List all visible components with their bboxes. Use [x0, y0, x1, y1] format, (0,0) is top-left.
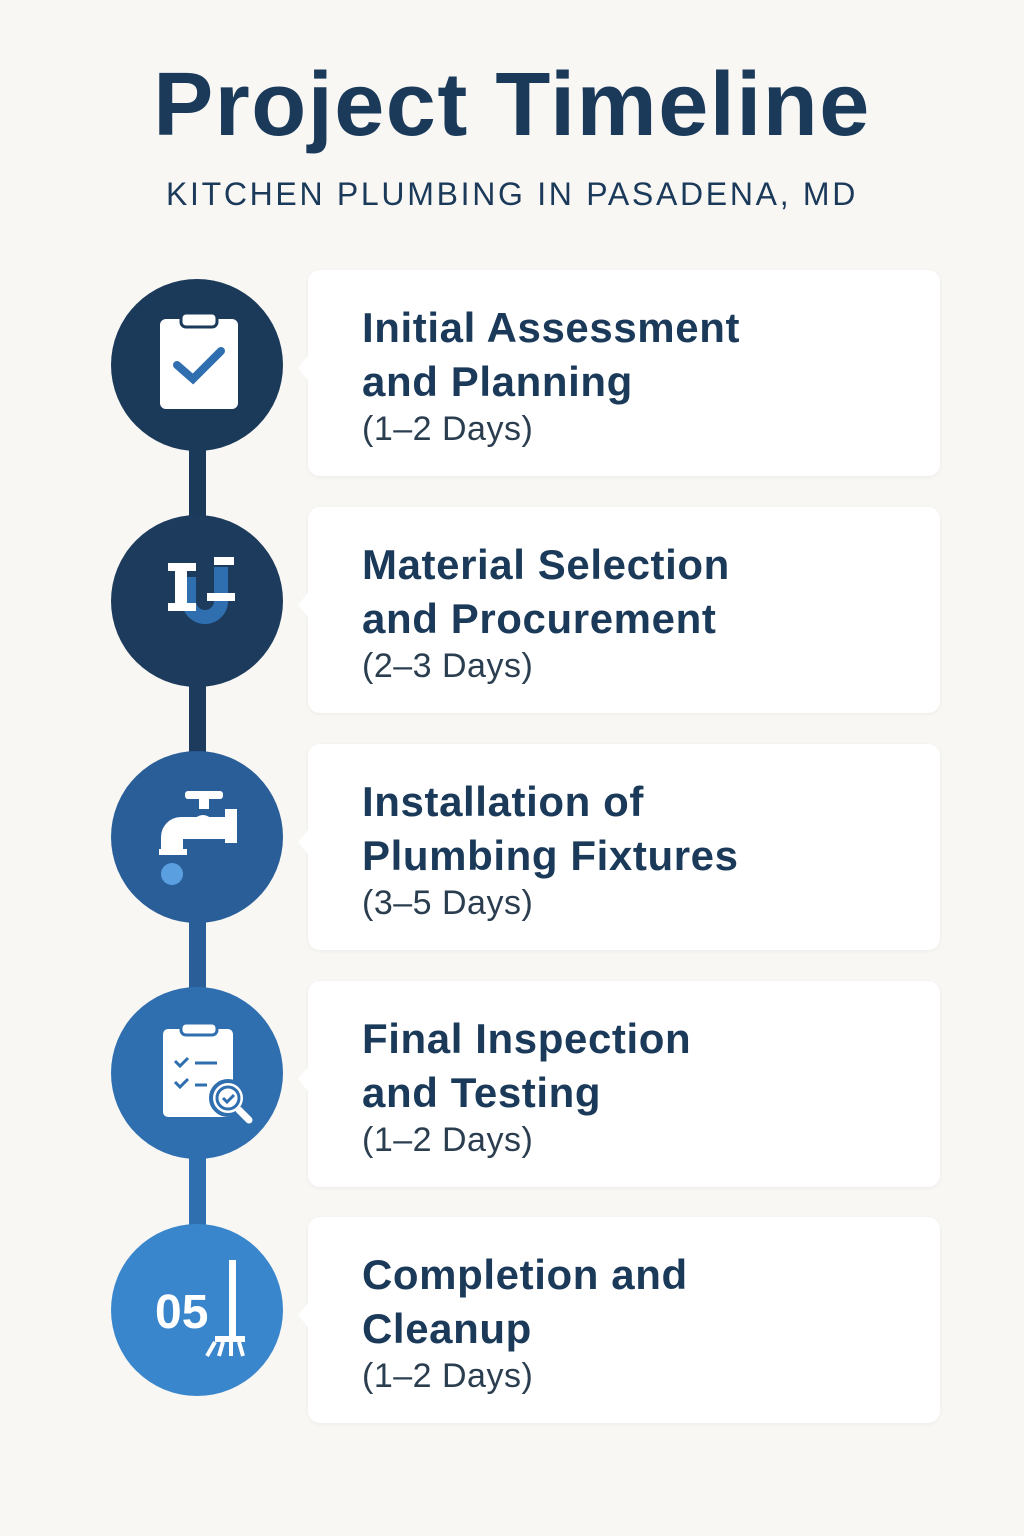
card 2: Material Selection: [362, 541, 730, 588]
card 3: [308, 744, 940, 950]
card 4: [308, 981, 940, 1187]
title: Project Timeline: [153, 55, 871, 155]
card 4: and Testing: [362, 1069, 601, 1116]
card 4: Final Inspection: [362, 1015, 691, 1062]
card 5: Completion and: [362, 1251, 688, 1298]
card 5: [308, 1217, 940, 1423]
subtitle: KITCHEN PLUMBING IN PASADENA, MD: [166, 176, 858, 212]
icon: pipe: [111, 515, 283, 687]
icon: faucet: [111, 751, 283, 923]
card 1: (1–2 Days): [362, 410, 533, 448]
icon: clipboard check: [111, 279, 283, 451]
card 3: Plumbing Fixtures: [362, 832, 739, 879]
card 2: (2–3 Days): [362, 647, 533, 685]
connector lines: [189, 450, 206, 1224]
card 2: [308, 507, 940, 713]
card 5: Cleanup: [362, 1305, 532, 1352]
icon: 05 broom: [111, 1224, 283, 1396]
card 4: (1–2 Days): [362, 1121, 533, 1159]
icon: inspection: [111, 987, 283, 1159]
card 1: and Planning: [362, 358, 633, 405]
icon: 05 broom: 05: [155, 1286, 208, 1339]
card 1: Initial Assessment: [362, 304, 740, 351]
card 3: Installation of: [362, 778, 644, 825]
card 3: (3–5 Days): [362, 884, 533, 922]
card 1: [308, 270, 940, 476]
card 5: (1–2 Days): [362, 1357, 533, 1395]
card 2: and Procurement: [362, 595, 716, 642]
